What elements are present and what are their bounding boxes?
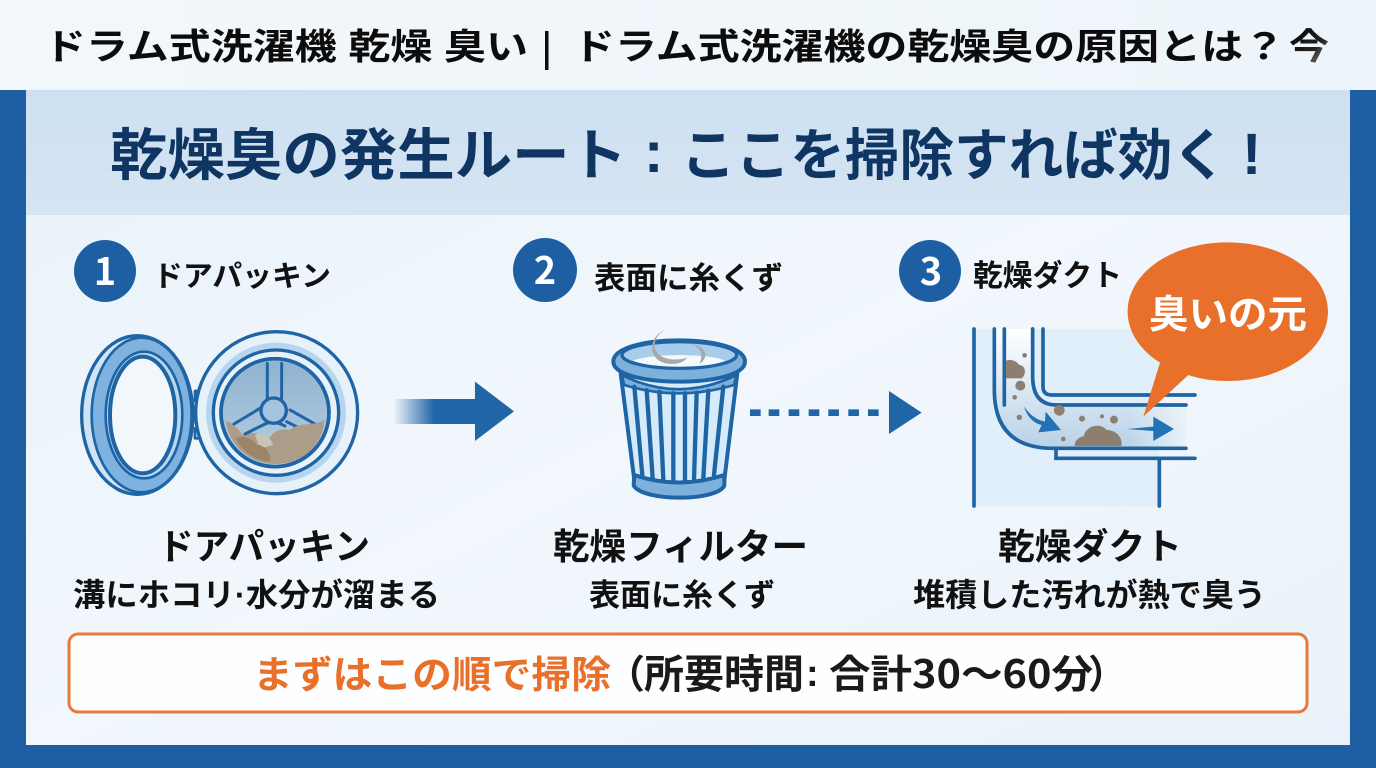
icon: drying duct <box>974 329 1195 506</box>
drum <box>196 332 358 494</box>
step 3 label <box>899 240 1122 302</box>
step 2 label: 2 <box>534 240 556 295</box>
title text: ドラム式洗濯機の乾燥臭の原因とは？ <box>573 26 1285 67</box>
title text: ドラム式洗濯機 乾燥 臭い <box>44 26 528 67</box>
callout box: cleaning order <box>69 634 1307 712</box>
title text <box>44 26 1329 70</box>
caption: drying filter: 乾燥フィルター <box>553 526 808 567</box>
duct walls <box>974 329 1195 506</box>
step 3 label: 乾燥ダクト <box>973 259 1122 293</box>
caption: door gasket: ドアパッキン <box>158 526 370 567</box>
caption: drying filter <box>553 526 808 613</box>
basket body <box>621 373 737 491</box>
step 1 label <box>74 240 331 302</box>
callout box: cleaning order: 合計30〜60分 <box>829 644 1093 700</box>
callout box: cleaning order: （ <box>606 644 645 700</box>
arrow: solid gradient arrow <box>393 382 514 441</box>
main heading <box>110 120 1261 187</box>
arrow: dashed arrow <box>750 391 922 434</box>
step 1 label: ドアパッキン <box>153 261 331 293</box>
icon: lint filter basket <box>613 329 745 498</box>
duct interior <box>994 329 1186 448</box>
airflow arrows <box>1024 407 1174 441</box>
lint curls <box>652 329 705 364</box>
basket rim <box>613 340 745 382</box>
callout box: cleaning order: 所要時間 <box>644 653 804 697</box>
main heading: : <box>644 120 663 185</box>
main heading: ! <box>1242 122 1261 187</box>
title text: 今 <box>1289 26 1329 67</box>
icon: washing machine door and drum <box>82 332 358 494</box>
callout: odor source <box>1128 242 1328 417</box>
caption: door gasket: 溝にホコリ·水分が溜まる <box>73 577 440 613</box>
open door ring <box>82 336 193 494</box>
main heading: ここを掃除すれば効く <box>681 124 1227 187</box>
caption: drying duct: 乾燥ダクト <box>998 526 1182 567</box>
step 1 label: 1 <box>94 241 116 296</box>
heading band <box>26 90 1350 215</box>
callout box: cleaning order: まずはこの順で掃除 <box>253 655 611 697</box>
callout: odor source: 臭いの元 <box>1149 294 1307 337</box>
caption: drying duct <box>913 526 1266 613</box>
dust <box>1006 353 1122 446</box>
main heading: 乾燥臭の発生ルート <box>110 124 627 187</box>
hinges <box>195 391 206 438</box>
caption: drying duct: 堆積した汚れが熱で臭う <box>913 577 1266 613</box>
step 2 label <box>513 238 783 302</box>
callout box: cleaning order: ） <box>1088 644 1127 700</box>
caption: door gasket <box>73 526 440 613</box>
step 3 label: 3 <box>920 241 942 296</box>
step 2 label: 表面に糸くず <box>594 261 783 296</box>
callout box: cleaning order: : <box>806 653 819 695</box>
top title bar <box>0 0 1376 90</box>
caption: drying filter: 表面に糸くず <box>589 578 775 613</box>
